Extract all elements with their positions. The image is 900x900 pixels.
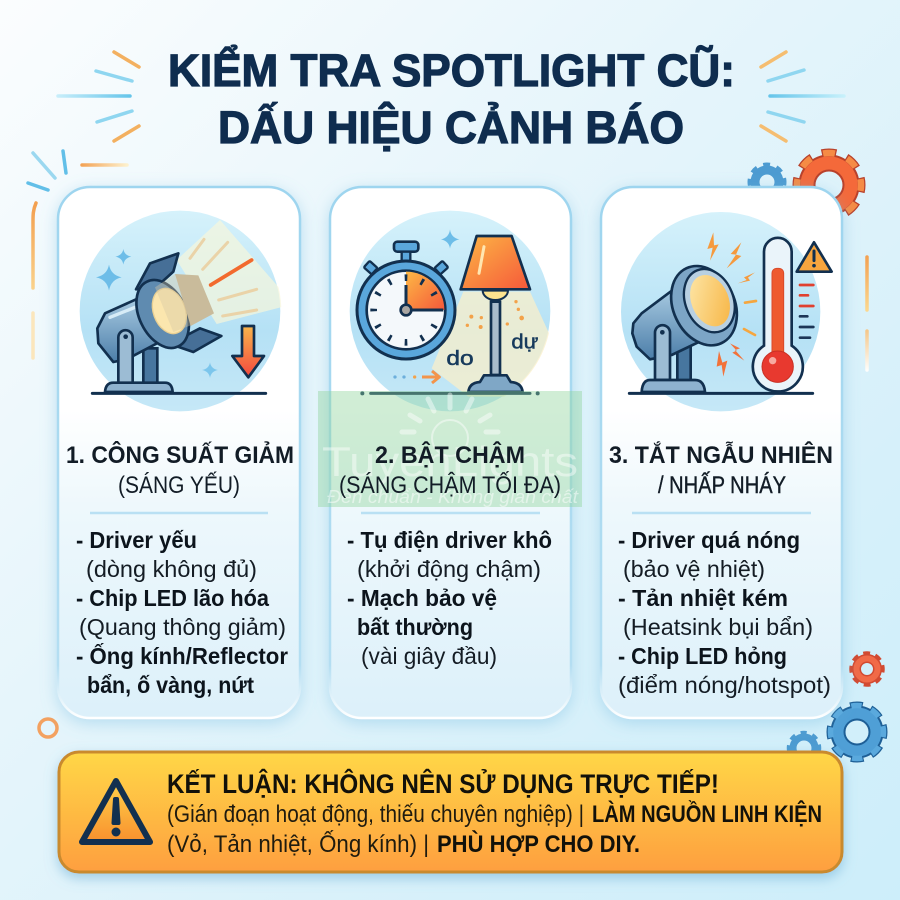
list 1: - Chip LED lão hóa <box>76 585 269 611</box>
conclusion text: (Gián đoạn hoạt động, thiếu chuyên nghiệp) | <box>167 801 584 828</box>
list 2: (khởi động chậm) <box>357 556 541 582</box>
conclusion banner <box>59 752 842 872</box>
title: KIỂM TRA SPOTLIGHT CŨ: <box>168 45 735 96</box>
illustration: overheating spotlight and thermometer <box>619 210 832 413</box>
panel 2 text <box>339 441 561 669</box>
conclusion text: PHÙ HỢP CHO DIY. <box>437 830 640 858</box>
watermark: Đèn chuẩn - Không gian chất <box>327 487 579 507</box>
illustration: stopwatch and lamp: do <box>446 347 474 370</box>
list 2: bất thường <box>357 614 473 640</box>
subheading 1: (SÁNG YẾU) <box>118 471 240 499</box>
list 1: bẩn, ố vàng, nứt <box>87 672 254 698</box>
subheading 3: / NHẤP NHÁY <box>658 471 786 499</box>
illustration: stopwatch and lamp <box>348 209 557 413</box>
decorative ring <box>39 719 57 737</box>
title <box>168 45 735 153</box>
gear: blue bottom right <box>830 706 884 758</box>
panel: 2 slow start <box>330 187 571 718</box>
gear: blue top right <box>750 165 784 199</box>
decorative rays: right side <box>865 257 869 370</box>
conclusion text: LÀM NGUỒN LINH KIỆN <box>592 800 822 828</box>
list 3: - Driver quá nóng <box>618 527 800 553</box>
list 2 <box>347 527 552 669</box>
list 3: - Chip LED hỏng <box>618 643 787 669</box>
gear: small orange right <box>852 654 882 684</box>
watermark: TuyenLights <box>322 438 578 485</box>
decorative rays: top left <box>28 52 139 358</box>
list 1: (dòng không đủ) <box>86 556 257 582</box>
list 1: - Ống kính/Reflector <box>76 642 288 669</box>
watermark <box>318 391 582 507</box>
illustration: dim spotlight with down arrow <box>78 209 293 413</box>
gear: orange top right <box>797 153 861 217</box>
list 3: (Heatsink bụi bẩn) <box>623 614 813 640</box>
list 1 <box>76 527 288 698</box>
icon: warning triangle <box>82 781 150 842</box>
heading 1: 1. CÔNG SUẤT GIẢM <box>66 440 294 469</box>
panel: 3 random off and flicker <box>601 187 842 718</box>
title: DẤU HIỆU CẢNH BÁO <box>218 102 684 153</box>
heading 2: 2. BẬT CHẬM <box>375 441 525 469</box>
gear: small blue bottom <box>789 733 819 763</box>
decorative rays: top right <box>761 52 844 141</box>
list 1: - Driver yếu <box>76 527 197 553</box>
illustration: stopwatch and lamp: dự <box>511 330 539 353</box>
conclusion text <box>167 800 822 858</box>
list 3: - Tản nhiệt kém <box>618 585 788 611</box>
list 3: (điểm nóng/hotspot) <box>618 672 831 698</box>
panel: 1 power drop <box>58 187 300 718</box>
subheading 2: (SÁNG CHẬM TỐI ĐA) <box>339 471 561 499</box>
list 3 <box>618 527 831 698</box>
list 3: (bảo vệ nhiệt) <box>623 556 765 582</box>
heading 3: 3. TẮT NGẪU NHIÊN <box>609 440 833 469</box>
list 2: - Mạch bảo vệ <box>347 585 497 611</box>
list 1: (Quang thông giảm) <box>79 614 286 640</box>
list 2: (vài giây đầu) <box>361 643 497 669</box>
conclusion heading: KẾT LUẬN: KHÔNG NÊN SỬ DỤNG TRỰC TIẾP! <box>167 767 719 799</box>
list 2: - Tụ điện driver khô <box>347 527 552 553</box>
conclusion text: (Vỏ, Tản nhiệt, Ống kính) | <box>167 830 429 858</box>
